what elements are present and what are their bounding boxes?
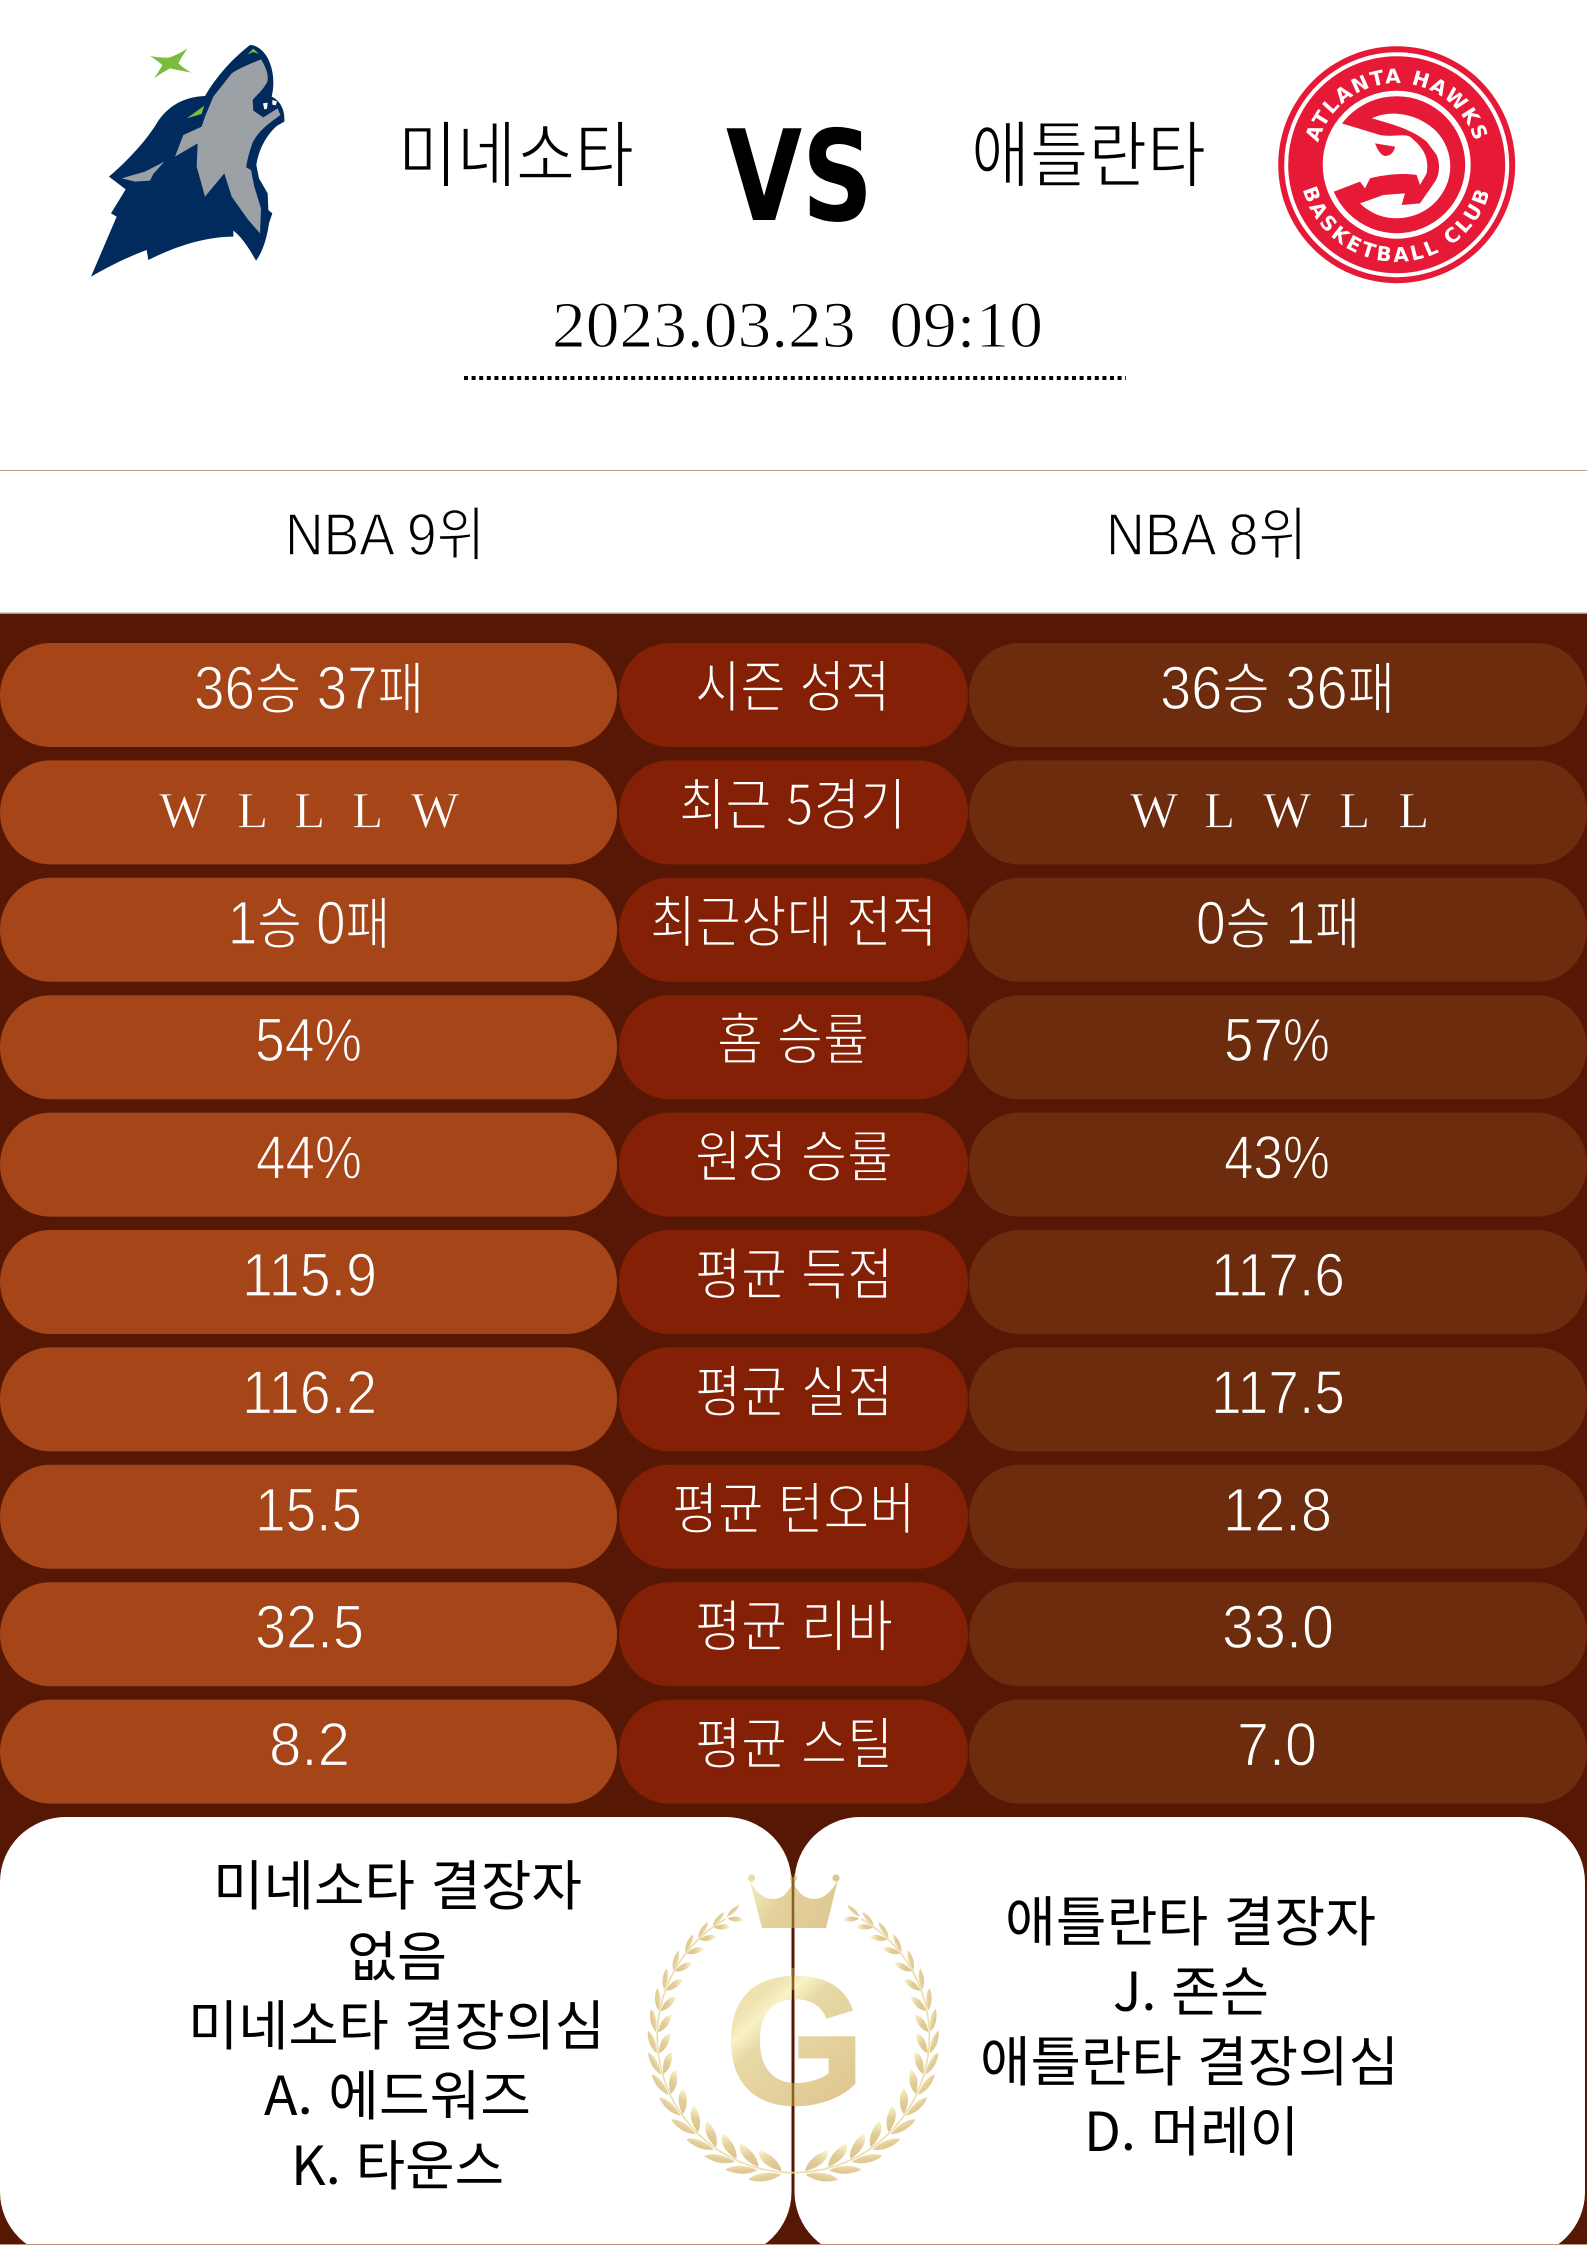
- away value: 117.6: [1211, 1241, 1345, 1309]
- icon: Atlanta Hawks logo: [1278, 46, 1516, 284]
- panel: Atlanta absences: [794, 1817, 1585, 2245]
- icon: gold crown and laurel emblem: [647, 1817, 939, 2183]
- away value: 7.0: [1237, 1711, 1317, 1779]
- home value: L: [352, 784, 381, 840]
- home value: [0, 878, 617, 982]
- home value: W: [159, 784, 208, 840]
- home value: [0, 1347, 617, 1451]
- label: [619, 760, 968, 864]
- label: [619, 995, 968, 1099]
- stat row: home win rate: [0, 995, 1587, 1099]
- label: [619, 1230, 968, 1334]
- home value: W: [411, 784, 460, 840]
- label: [619, 1700, 968, 1804]
- away value: [969, 1465, 1587, 1569]
- home value: [0, 1113, 617, 1217]
- home value: 1승 0패: [228, 880, 390, 961]
- label: 홈 승률: [717, 996, 869, 1076]
- home value: [0, 1465, 617, 1569]
- label: [619, 1582, 968, 1686]
- player: D. Murray: D. 머레이: [1084, 2088, 1299, 2167]
- away value: L: [1204, 784, 1233, 840]
- stat row: head to head: [0, 878, 1587, 982]
- stat row: average turnovers: [0, 1465, 1587, 1569]
- away value: [969, 1230, 1587, 1334]
- away value: 0승 1패: [1196, 880, 1360, 961]
- away value: 33.0: [1222, 1593, 1334, 1661]
- away value: 117.5: [1211, 1358, 1345, 1426]
- label: 최근 5경기: [679, 761, 906, 842]
- player: K. Towns: K. 타운스: [291, 2122, 504, 2201]
- label: 평균 실점: [695, 1348, 893, 1429]
- away value: W: [1130, 784, 1179, 840]
- heading: Atlanta doubtful: 애틀란타 결장의심: [980, 2018, 1399, 2097]
- home value: [0, 1582, 617, 1686]
- stat row: season record: [0, 643, 1587, 747]
- letter G: G: [725, 1941, 865, 2142]
- icon: Atlanta Hawks logo: BASKETBALL CLUB: [1303, 186, 1488, 262]
- label: 원정 승률: [695, 1113, 893, 1194]
- label: [619, 1465, 968, 1569]
- player: A. Edwards: A. 에드워즈: [264, 2052, 531, 2131]
- stat row: last five games: [0, 760, 1587, 864]
- away value: 43%: [1224, 1124, 1330, 1192]
- heading: Minnesota out: 미네소타 결장자: [213, 1842, 582, 1921]
- away value: 57%: [1224, 1006, 1330, 1074]
- home value: 44%: [256, 1124, 362, 1192]
- away value: L: [1398, 784, 1429, 840]
- away value: [969, 1113, 1587, 1217]
- label: [619, 1347, 968, 1451]
- title: VS: VS: [726, 103, 873, 250]
- crown: [748, 1874, 840, 1928]
- player list: none: 없음: [347, 1913, 447, 1992]
- heading: Minnesota doubtful: 미네소타 결장의심: [188, 1982, 605, 2061]
- player: J. Johnson: J. 존슨: [1113, 1948, 1269, 2027]
- away value: [969, 760, 1587, 864]
- panel: stats background: [0, 613, 1587, 2245]
- home value: 32.5: [255, 1593, 364, 1661]
- home value: 8.2: [269, 1711, 350, 1779]
- home value: [0, 995, 617, 1099]
- away value: [969, 1700, 1587, 1804]
- label: 평균 턴오버: [672, 1465, 915, 1546]
- icon: Minnesota Timberwolves logo: [91, 45, 284, 277]
- away value: [969, 995, 1587, 1099]
- laurel left branch: [647, 1905, 793, 2183]
- label: 평균 리바: [695, 1582, 893, 1664]
- home value: 36승 37패: [194, 645, 424, 726]
- label: 최근상대 전적: [650, 878, 937, 959]
- home value: [0, 760, 617, 864]
- home value: 116.2: [242, 1358, 377, 1426]
- away team league rank: NBA 8위: [1106, 488, 1307, 572]
- home value: [0, 1700, 617, 1804]
- away value: 36승 36패: [1160, 645, 1395, 726]
- label: 평균 득점: [695, 1230, 893, 1312]
- panel: Minnesota absences: [0, 1817, 792, 2245]
- home value: 54%: [255, 1006, 362, 1074]
- home value: 15.5: [255, 1476, 362, 1544]
- heading: Atlanta out: 애틀란타 결장자: [1005, 1878, 1376, 1957]
- label: [619, 878, 968, 982]
- away value: [969, 1347, 1587, 1451]
- home value: L: [237, 784, 266, 840]
- title: away team: 애틀란타: [971, 97, 1206, 202]
- label: [619, 1113, 968, 1217]
- title: home team: 미네소타: [398, 97, 634, 202]
- home team league rank: NBA 9위: [285, 488, 485, 572]
- home value: [0, 1230, 617, 1334]
- away value: W: [1263, 784, 1312, 840]
- laurel right branch: [793, 1905, 939, 2183]
- home value: L: [294, 784, 323, 840]
- away value: [969, 878, 1587, 982]
- stat row: away win rate: [0, 1113, 1587, 1217]
- icon: Atlanta Hawks logo: ATLANTA HAWKS: [1306, 68, 1488, 142]
- stat row: average points: [0, 1230, 1587, 1334]
- home value: 115.9: [242, 1241, 377, 1309]
- label: 평균 스틸: [695, 1700, 893, 1781]
- match date and time: 2023.03.23 09:10: [552, 289, 1043, 362]
- label: 시즌 성적: [695, 643, 890, 724]
- away value: L: [1339, 784, 1368, 840]
- away value: [969, 1582, 1587, 1686]
- away value: [969, 643, 1587, 747]
- away value: 12.8: [1223, 1476, 1332, 1544]
- home value: [0, 643, 617, 747]
- stat row: average steals: [0, 1700, 1587, 1804]
- label: [619, 643, 968, 747]
- stat row: average points allowed: [0, 1347, 1587, 1451]
- stat row: average rebounds: [0, 1582, 1587, 1686]
